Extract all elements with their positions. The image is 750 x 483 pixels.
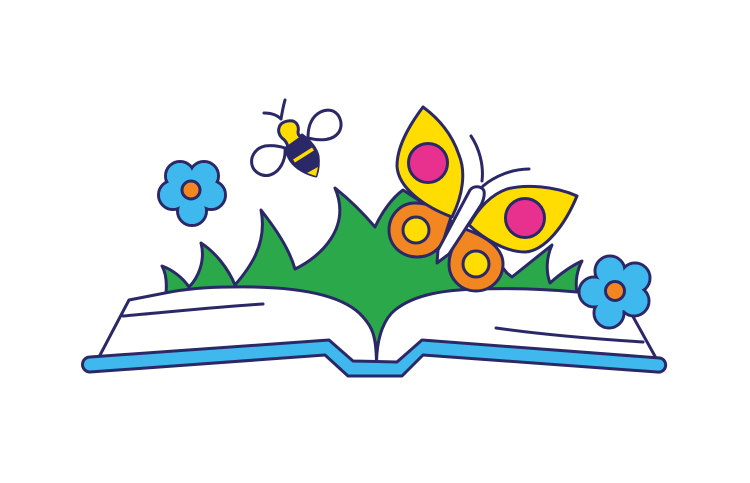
upper right wing spot bbox=[506, 198, 544, 238]
butterfly body bbox=[437, 187, 484, 263]
lower left wing bbox=[389, 203, 451, 257]
bee stripe bbox=[294, 149, 313, 161]
bee tail bbox=[307, 167, 318, 176]
right page bbox=[376, 289, 656, 362]
upper left wing bbox=[397, 107, 463, 217]
grass bbox=[162, 188, 582, 345]
flower centre bbox=[182, 181, 200, 199]
bee head bbox=[279, 121, 302, 147]
bee right wing bbox=[308, 110, 341, 140]
flower: left bbox=[158, 162, 226, 226]
butterfly bbox=[389, 107, 577, 291]
lower left wing spot bbox=[403, 217, 429, 243]
lower right wing bbox=[449, 229, 503, 291]
upper right wing bbox=[469, 186, 577, 252]
book bbox=[83, 287, 666, 376]
left page bbox=[99, 287, 376, 362]
bee abdomen bbox=[287, 135, 318, 176]
antennae bbox=[471, 136, 529, 186]
lower right wing spot bbox=[463, 251, 489, 277]
bee antennae bbox=[264, 100, 285, 119]
upper left wing spot bbox=[408, 144, 448, 182]
flower: right bbox=[579, 256, 650, 328]
bee left wing bbox=[252, 146, 285, 176]
blue book cover bbox=[83, 340, 666, 376]
right page text line bbox=[496, 328, 643, 342]
flower centre bbox=[606, 282, 624, 300]
bee bbox=[252, 100, 341, 176]
left page text line bbox=[123, 304, 263, 316]
